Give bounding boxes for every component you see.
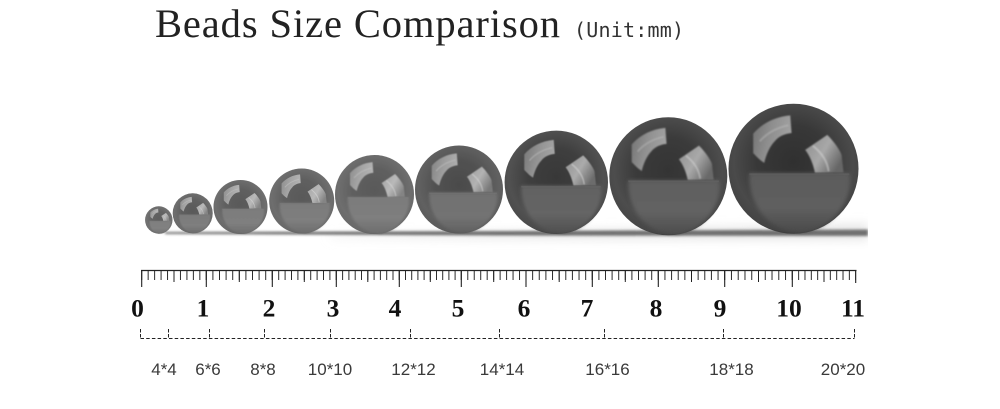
ruler numbers: 3 — [327, 294, 339, 322]
ruler numbers: 11 — [841, 294, 865, 322]
bead: 16mm — [505, 131, 608, 234]
ruler — [141, 270, 856, 287]
size labels: 14*14 — [480, 360, 524, 379]
ruler numbers: 9 — [714, 294, 726, 322]
bead: 6mm — [173, 193, 213, 233]
ruler numbers: 6 — [518, 294, 530, 322]
ruler numbers: 0 — [131, 294, 144, 322]
unit label: (Unit:mm) — [574, 18, 684, 42]
size labels: 8*8 — [250, 360, 276, 379]
size labels: 12*12 — [391, 360, 436, 379]
ruler numbers — [131, 294, 865, 322]
size labels: 16*16 — [585, 360, 630, 379]
bead: 4mm — [145, 206, 172, 234]
ruler numbers: 10 — [776, 294, 802, 322]
bead: 20mm — [728, 104, 858, 234]
size labels: 18*18 — [709, 360, 754, 379]
bead: 12mm — [335, 155, 414, 234]
bead: 8mm — [214, 180, 268, 234]
bead: 18mm — [609, 117, 727, 235]
size labels — [151, 360, 865, 379]
bead: 14mm — [415, 146, 503, 234]
ruler numbers: 8 — [650, 294, 662, 322]
ruler numbers: 2 — [263, 294, 275, 322]
size labels: 6*6 — [195, 360, 221, 379]
size labels: 10*10 — [308, 360, 352, 379]
dashed size bracket — [140, 329, 854, 339]
ruler numbers: 7 — [581, 294, 594, 322]
size labels: 20*20 — [821, 360, 865, 379]
ground shadow — [165, 224, 868, 240]
bead: 10mm — [269, 168, 334, 234]
ruler numbers: 4 — [389, 294, 402, 322]
size labels: 4*4 — [151, 360, 177, 379]
ruler numbers: 1 — [197, 294, 209, 322]
title: Beads Size Comparison — [155, 1, 560, 46]
ruler numbers: 5 — [452, 294, 464, 322]
